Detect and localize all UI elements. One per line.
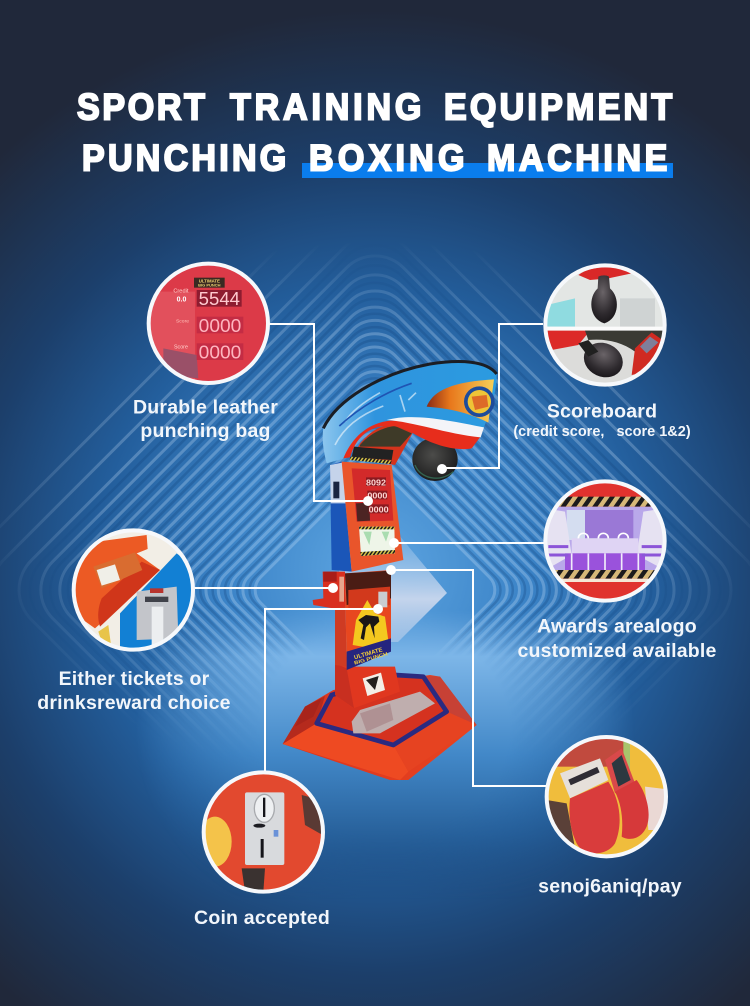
base — [283, 675, 477, 780]
callout: coin acceptor photo circle — [202, 770, 325, 894]
title: BOXING — [309, 137, 464, 179]
title underline bar — [302, 163, 673, 178]
plinth — [335, 663, 400, 708]
machine lower: column and base — [283, 570, 477, 780]
callout: scoreboard photo circle: BIG PUNCH — [198, 282, 221, 287]
label: durable leather punching bag: punching bag — [140, 420, 271, 442]
label: tickets or drinks: drinksreward choice — [37, 692, 231, 714]
connector lines and dots — [193, 324, 547, 786]
plinth logo label — [363, 673, 385, 696]
machine lower: column and base: BIG PUNCH — [354, 651, 389, 667]
machine upper: cabinet, head and bag — [323, 362, 497, 572]
label: scoreboard: (credit score, score 1&2) — [513, 424, 691, 440]
title: MACHINE — [487, 137, 667, 179]
callout: scoreboard photo circle: 5544 — [199, 288, 240, 309]
label: scoreboard: Scoreboard — [547, 400, 657, 422]
callout: scoreboard photo circle: 0000 — [199, 342, 241, 363]
head black rim — [323, 362, 497, 428]
head flame panel — [427, 379, 494, 423]
head logo — [464, 386, 495, 417]
scoreboard panel — [352, 468, 393, 522]
callout: awards area photo circle — [543, 479, 667, 603]
scoreboard panel: 0000 — [369, 505, 389, 515]
screen under head — [349, 424, 413, 465]
callout: scoreboard photo circle: Score — [176, 318, 189, 324]
awards panel — [359, 527, 395, 556]
machine lower: column and base: ULTIMATE — [354, 647, 383, 661]
callout: punching bag photo circle — [543, 263, 667, 387]
label: scoreboard — [513, 400, 691, 440]
callout: scoreboard photo circle: 0.0 — [177, 297, 186, 304]
fighter flame art — [353, 600, 388, 647]
title: EQUIPMENT — [444, 86, 672, 128]
label: awards area logo customized: customized available — [517, 640, 717, 662]
head red lower band — [343, 421, 481, 458]
label: payment: senoj6aniq/pay — [538, 876, 682, 898]
head blue shell — [323, 362, 497, 463]
callout: scoreboard photo circle — [146, 262, 270, 385]
title: PUNCHING — [82, 137, 286, 179]
callout: scoreboard photo circle: Score — [174, 344, 188, 350]
callout: scoreboard photo circle: Credit — [173, 288, 189, 294]
column front — [345, 570, 391, 670]
title: SPORT — [77, 86, 205, 128]
label: awards area logo customized: Awards arealogo — [537, 616, 697, 638]
ticket and coin unit — [313, 572, 345, 608]
head highlights — [335, 393, 416, 445]
callout: scoreboard photo circle: 0000 — [199, 315, 241, 336]
scoreboard panel: 0000 — [367, 491, 388, 501]
label: durable leather punching bag: Durable leather — [133, 396, 278, 418]
head white stripe — [387, 417, 484, 437]
title — [77, 86, 673, 179]
cabinet front — [342, 462, 403, 572]
punching bag — [412, 438, 458, 481]
callout: tickets and drinks photo circle — [72, 528, 195, 652]
label: tickets or drinks: Either tickets or — [59, 668, 209, 690]
label: coin accepted: Coin accepted — [194, 907, 330, 929]
column side — [335, 573, 347, 667]
scoreboard panel: 8092 — [366, 477, 386, 487]
callout: boxing gloves photo circle — [544, 735, 668, 858]
cabinet side — [330, 462, 352, 572]
callout: scoreboard photo circle: ULTIMATE — [199, 278, 220, 283]
title: TRAINING — [230, 86, 421, 128]
product name band — [347, 638, 391, 670]
boxing machine — [283, 362, 497, 780]
